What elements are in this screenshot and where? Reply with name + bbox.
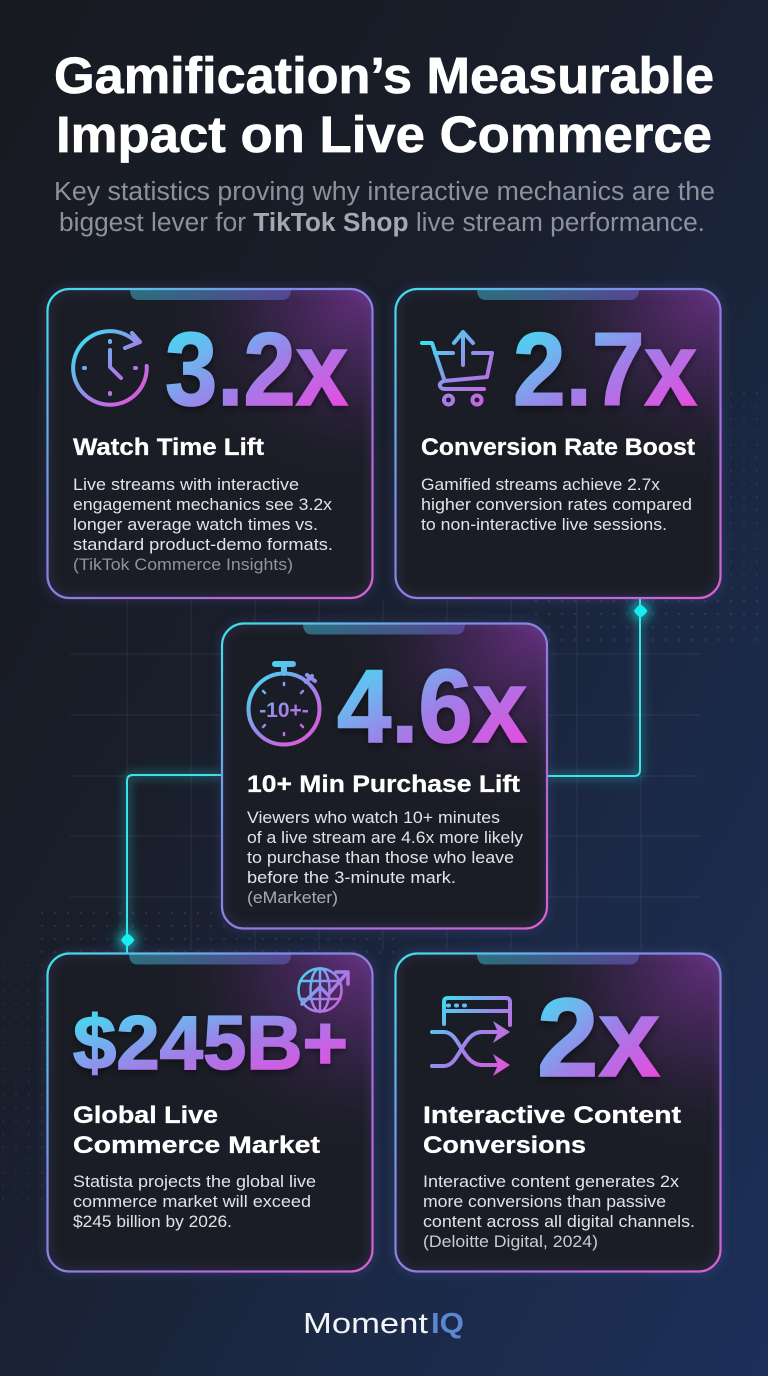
icon: clock with arrow	[73, 331, 147, 405]
description: Gamified streams achieve 2.7x	[421, 476, 660, 494]
subtitle: biggest lever for TikTok Shop live stream performance.	[59, 209, 705, 237]
description: to purchase than those who leave	[247, 849, 514, 867]
description	[421, 476, 692, 534]
title: Impact on Live Commerce	[56, 106, 712, 163]
description	[423, 1173, 695, 1251]
title: Gamification’s Measurable	[54, 47, 714, 104]
description: (Deloitte Digital, 2024)	[423, 1233, 598, 1251]
icon: browser window and shuffle arrows	[432, 998, 510, 1076]
stat: $245B+: $245B+	[73, 1001, 348, 1086]
logo: MomentIQ: Moment	[303, 1308, 428, 1340]
panel: watch time lift	[48, 289, 372, 598]
subtitle	[54, 178, 715, 237]
heading: Interactive Content	[423, 1102, 681, 1129]
icon: shopping cart with up arrow	[422, 332, 492, 404]
description	[73, 1173, 316, 1231]
connector: purchase card to market card	[116, 775, 221, 953]
description: content across all digital channels.	[423, 1213, 695, 1231]
heading: Conversions	[423, 1132, 586, 1159]
connector: conversion card to purchase card	[547, 598, 652, 776]
icon: stopwatch 10+: -10+-	[259, 699, 309, 722]
stat: 4.6x: 4.6x	[337, 649, 527, 765]
description: $245 billion by 2026.	[73, 1213, 232, 1231]
stat: 3.2x: 3.2x	[165, 312, 348, 428]
description: more conversions than passive	[423, 1193, 666, 1211]
panel: conversion rate boost	[396, 289, 720, 598]
panel: interactive content conversions	[396, 954, 720, 1272]
panel: 10+ min purchase lift	[222, 624, 547, 928]
heading	[423, 1102, 681, 1159]
description: standard product-demo formats.	[73, 536, 333, 554]
background grid and dot texture	[0, 380, 768, 1210]
description: Interactive content generates 2x	[423, 1173, 679, 1191]
description: engagement mechanics see 3.2x	[73, 496, 332, 514]
subtitle: Key statistics proving why interactive mechanics are the	[54, 178, 715, 206]
logo: MomentIQ	[303, 1308, 464, 1340]
description: (TikTok Commerce Insights)	[73, 556, 293, 574]
panel: global live commerce market	[48, 954, 372, 1272]
description	[247, 809, 524, 907]
description: before the 3-minute mark.	[247, 869, 456, 887]
stat: 2.7x: 2.7x	[513, 312, 697, 428]
description: Statista projects the global live	[73, 1173, 316, 1191]
description: Live streams with interactive	[73, 476, 299, 494]
stat: 2x: 2x	[537, 976, 660, 1100]
icon: stopwatch 10+	[248, 664, 320, 744]
description: of a live stream are 4.6x more likely	[247, 829, 524, 847]
heading: 10+ Min Purchase Lift	[247, 771, 520, 798]
heading: Global Live	[73, 1102, 218, 1129]
heading: Watch Time Lift	[73, 434, 264, 461]
description: longer average watch times vs.	[73, 516, 318, 534]
icon: globe with growth arrow	[298, 968, 348, 1012]
description: Viewers who watch 10+ minutes	[247, 809, 500, 827]
heading	[73, 1102, 320, 1159]
description	[73, 476, 333, 574]
heading: Conversion Rate Boost	[421, 434, 695, 461]
title	[54, 47, 714, 163]
description: commerce market will exceed	[73, 1193, 311, 1211]
description: (eMarketer)	[247, 889, 338, 907]
description: to non-interactive live sessions.	[421, 516, 667, 534]
heading: Commerce Market	[73, 1132, 320, 1159]
logo: MomentIQ: IQ	[431, 1308, 464, 1340]
description: higher conversion rates compared	[421, 496, 692, 514]
